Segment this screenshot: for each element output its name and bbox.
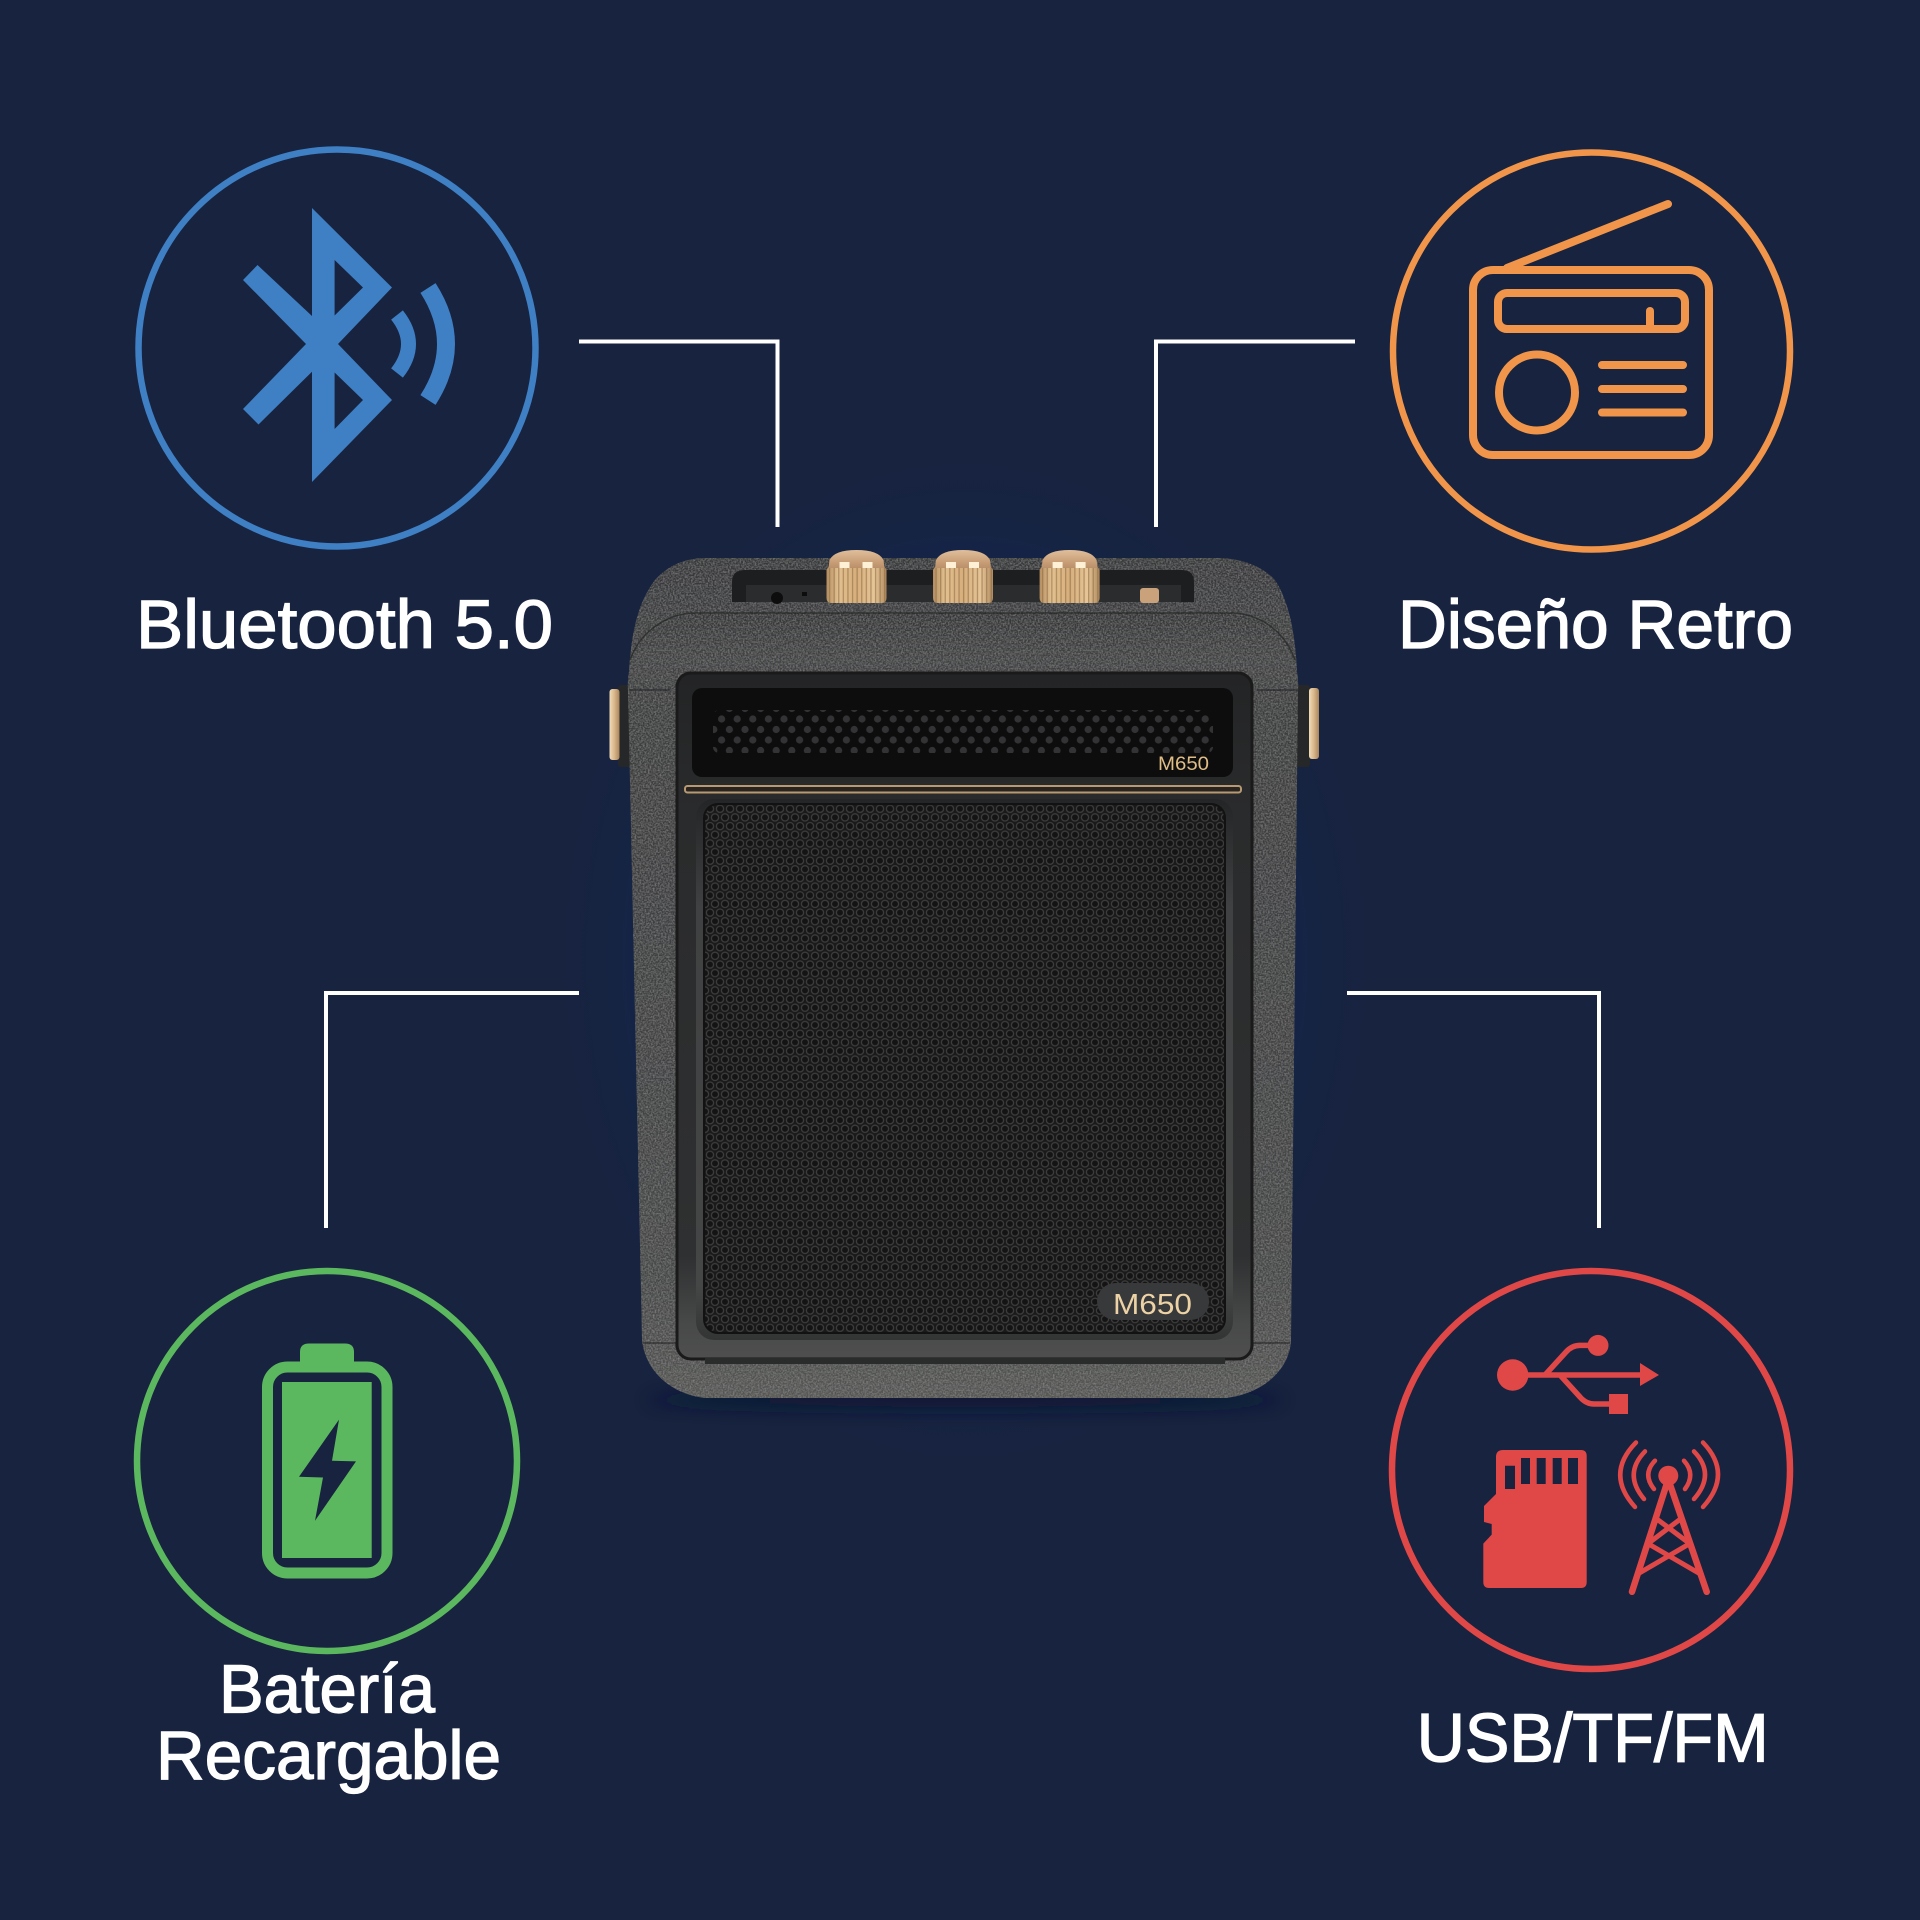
connector: ports to speaker [1347, 993, 1599, 1228]
speaker top shell [629, 558, 1297, 670]
perforated band [713, 710, 1213, 753]
icon: micro SD card [1483, 1450, 1587, 1588]
left handle mount [610, 685, 632, 767]
knob: center [933, 550, 993, 603]
panel: bluetooth feature [136, 150, 553, 663]
panel: USB TF FM feature [1392, 1271, 1790, 1776]
label: USB/TF/FM: USB/TF/FM [1417, 1699, 1769, 1776]
bluetooth ring [138, 150, 536, 546]
label: Batería Recargable: Recargable [156, 1717, 501, 1794]
connector: battery to speaker [326, 993, 579, 1228]
gold strip [685, 786, 1241, 792]
icon: usb symbol [1497, 1335, 1659, 1414]
model badge [1097, 1283, 1209, 1321]
panel: rechargeable battery feature [137, 1271, 517, 1794]
ports ring [1392, 1271, 1790, 1669]
right handle mount [1296, 685, 1319, 767]
background glow behind speaker [545, 440, 1385, 1480]
model mark: M650 [1158, 753, 1209, 775]
label: Batería Recargable [156, 1650, 501, 1794]
top window [692, 688, 1233, 777]
label: Batería Recargable: Batería [219, 1650, 436, 1728]
connector: retro design to speaker [1156, 342, 1355, 527]
knob: left [826, 550, 886, 603]
knob: right [1040, 550, 1100, 603]
icon: bluetooth symbol with waves [243, 208, 446, 482]
front panel frame [677, 673, 1252, 1359]
shell seams [629, 613, 1298, 1343]
connector: bluetooth to speaker [579, 342, 778, 527]
icon: FM radio tower [1620, 1442, 1718, 1592]
model badge: M650 [1113, 1289, 1192, 1321]
speaker product illustration [610, 550, 1319, 1408]
speaker grille lip [696, 799, 1233, 1340]
control well [732, 570, 1194, 604]
label: Diseño Retro: Diseño Retro [1398, 586, 1793, 663]
speaker front shell [628, 613, 1298, 1398]
retro ring [1393, 152, 1790, 550]
panel: retro design feature [1393, 152, 1793, 663]
icon: battery with bolt [268, 1344, 387, 1573]
label: Bluetooth 5.0: Bluetooth 5.0 [136, 586, 553, 663]
icon: radio [1473, 204, 1709, 455]
battery ring [137, 1271, 517, 1651]
speaker shadow [645, 1392, 1285, 1408]
lower seam [705, 1358, 1225, 1364]
speaker grille mesh [704, 804, 1225, 1333]
